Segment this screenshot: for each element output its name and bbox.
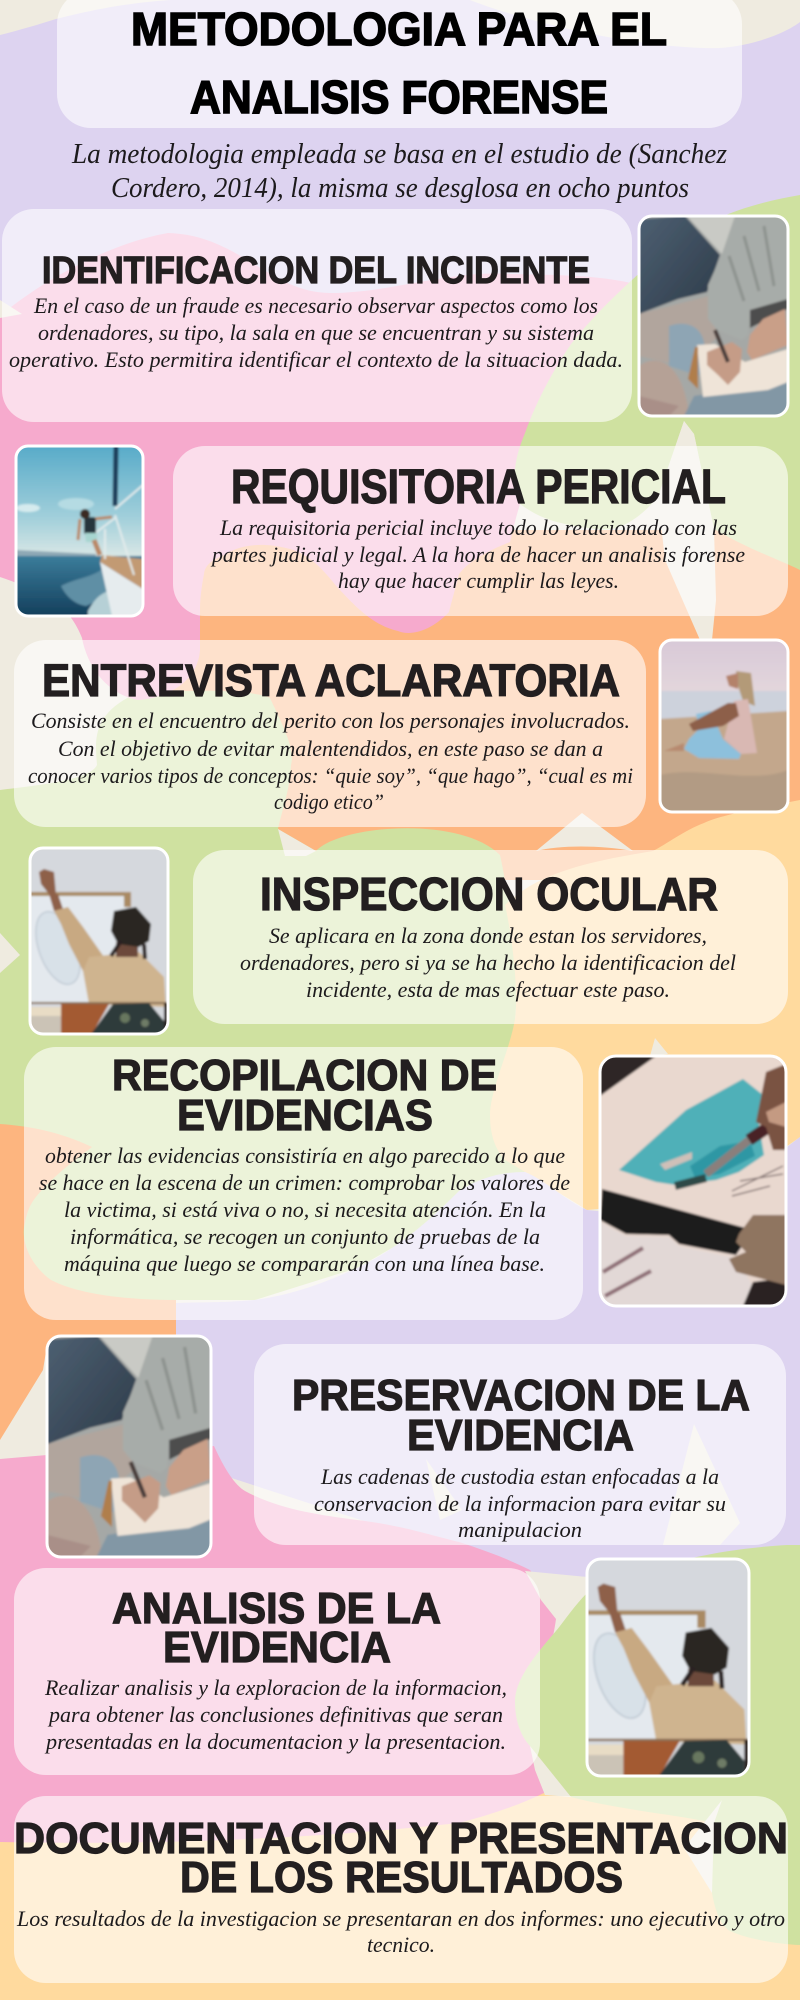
body: identificacion: En el caso de un fraude es necesario observar aspectos como los bbox=[33, 293, 598, 318]
body: recopilacion: obtener las evidencias consistiría en algo parecido a lo que bbox=[45, 1143, 565, 1168]
body: analisis: para obtener las conclusiones definitivas que seran bbox=[47, 1702, 503, 1727]
panel: analisis de la evidencia bbox=[14, 1568, 540, 1775]
body: identificacion: ordenadores, su tipo, la sala en que se encuentran y su sistema bbox=[38, 320, 594, 345]
heading: analisis bbox=[112, 1584, 441, 1672]
body: preservacion bbox=[314, 1464, 726, 1542]
body: inspeccion: Se aplicara en la zona donde estan los servidores, bbox=[269, 923, 707, 948]
photo: person writing, second instance bbox=[47, 1336, 211, 1557]
photo: person on sailing boat bbox=[16, 446, 143, 616]
body: identificacion: operativo. Esto permitira identificar el contexto de la situacion dada. bbox=[9, 347, 623, 372]
heading: recopilacion bbox=[112, 1051, 497, 1140]
photo: woman sitting on beach bbox=[660, 640, 788, 812]
body: identificacion bbox=[9, 293, 623, 372]
body: inspeccion: incidente, esta de mas efectuar este paso. bbox=[306, 977, 670, 1002]
heading: inspeccion: INSPECCION OCULAR bbox=[260, 868, 718, 920]
title text: METODOLOGIA PARA EL bbox=[131, 3, 667, 55]
body: inspeccion bbox=[240, 923, 736, 1002]
heading: documentacion: DOCUMENTACION Y PRESENTACION bbox=[14, 1814, 788, 1863]
panel: entrevista aclaratoria bbox=[14, 640, 646, 827]
heading: analisis: ANALISIS DE LA bbox=[112, 1584, 441, 1633]
body: recopilacion: la victima, si está viva o no, si necesita atención. En la bbox=[64, 1197, 546, 1222]
photo: hand painting with brush bbox=[600, 1056, 786, 1306]
title text: ANALISIS FORENSE bbox=[190, 71, 608, 123]
panel: requisitoria pericial bbox=[173, 446, 788, 616]
body: inspeccion: ordenadores, pero si ya se ha hecho la identificacion del bbox=[240, 950, 736, 975]
body: entrevista bbox=[28, 708, 633, 814]
body: documentacion: Los resultados de la investigacion se presentaran en dos informes: uno ejecutivo y otro bbox=[16, 1906, 785, 1931]
heading: recopilacion: RECOPILACION DE bbox=[112, 1051, 497, 1100]
panel: inspeccion ocular bbox=[193, 850, 788, 1024]
panel: preservacion de la evidencia bbox=[254, 1344, 786, 1545]
photo: student raising hand bbox=[27, 848, 168, 1034]
heading: requisitoria: REQUISITORIA PERICIAL bbox=[231, 461, 726, 514]
body: analisis: Realizar analisis y la exploracion de la informacion, bbox=[44, 1675, 507, 1700]
heading: analisis: EVIDENCIA bbox=[163, 1623, 391, 1672]
body: preservacion: manipulacion bbox=[458, 1517, 582, 1542]
body: preservacion: conservacion de la informacion para evitar su bbox=[314, 1491, 726, 1516]
photo: person writing in notebook bbox=[639, 216, 788, 416]
subtitle: Cordero, 2014), la misma se desglosa en ocho puntos bbox=[111, 173, 689, 204]
title panel bbox=[57, 0, 742, 128]
title text bbox=[131, 3, 667, 123]
heading: documentacion bbox=[14, 1814, 788, 1902]
body: entrevista: Con el objetivo de evitar malentendidos, en este paso se dan a bbox=[58, 736, 603, 761]
body: entrevista: Consiste en el encuentro del perito con los personajes involucrados. bbox=[31, 708, 630, 733]
panel: documentacion y presentacion bbox=[14, 1796, 788, 1983]
heading: preservacion bbox=[292, 1371, 750, 1460]
subtitle bbox=[71, 139, 727, 204]
body: entrevista: conocer varios tipos de conceptos: “quie soy”, “que hago”, “cual es mi bbox=[28, 763, 633, 788]
heading: preservacion: PRESERVACION DE LA bbox=[292, 1371, 750, 1420]
panel: identificacion del incidente bbox=[2, 209, 632, 422]
body: documentacion: tecnico. bbox=[367, 1932, 435, 1957]
body: analisis: presentadas en la documentacion y la presentacion. bbox=[44, 1729, 506, 1754]
subtitle: La metodologia empleada se basa en el estudio de (Sanchez bbox=[71, 139, 727, 170]
heading: identificacion: IDENTIFICACION DEL INCIDENTE bbox=[42, 250, 590, 292]
body: recopilacion: informática, se recogen un conjunto de pruebas de la bbox=[70, 1224, 540, 1249]
heading: recopilacion: EVIDENCIAS bbox=[177, 1091, 433, 1140]
body: requisitoria: partes judicial y legal. A la hora de hacer un analisis forense bbox=[210, 542, 745, 567]
body: entrevista: codigo etico” bbox=[274, 789, 384, 814]
panel: recopilacion de evidencias bbox=[24, 1047, 583, 1320]
body: preservacion: Las cadenas de custodia estan enfocadas a la bbox=[320, 1464, 719, 1489]
body: requisitoria: hay que hacer cumplir las leyes. bbox=[338, 568, 619, 593]
photo: student raising hand, second instance bbox=[584, 1559, 749, 1776]
body: requisitoria bbox=[210, 515, 745, 593]
heading: entrevista: ENTREVISTA ACLARATORIA bbox=[42, 655, 620, 706]
body: analisis bbox=[44, 1675, 507, 1754]
body: recopilacion bbox=[39, 1143, 570, 1276]
body: recopilacion: máquina que luego se compararán con una línea base. bbox=[64, 1251, 545, 1276]
body: requisitoria: La requisitoria pericial incluye todo lo relacionado con las bbox=[219, 515, 737, 540]
body: documentacion bbox=[16, 1906, 785, 1957]
body: recopilacion: se hace en la escena de un crimen: comprobar los valores de bbox=[39, 1170, 570, 1195]
heading: documentacion: DE LOS RESULTADOS bbox=[180, 1853, 623, 1902]
heading: preservacion: EVIDENCIA bbox=[407, 1411, 634, 1460]
